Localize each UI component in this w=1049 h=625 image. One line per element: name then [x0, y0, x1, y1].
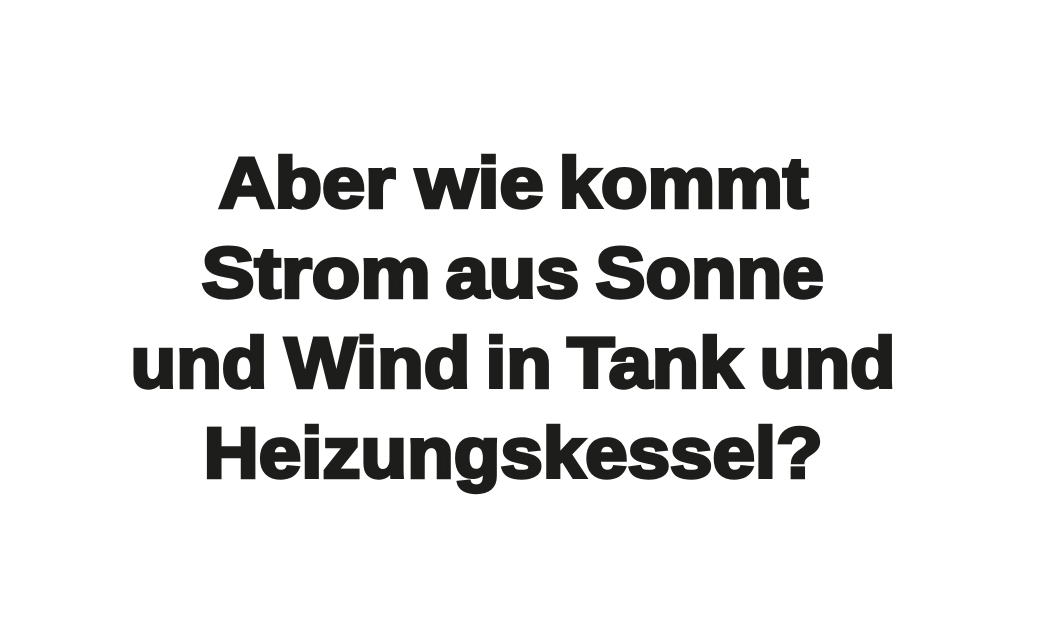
- title line 1: kommt: [559, 144, 808, 224]
- title line 3: und: [131, 324, 267, 404]
- title line 2: aus: [446, 234, 579, 314]
- title line 2: Strom: [202, 234, 431, 314]
- title line 1: wie: [415, 144, 544, 224]
- title line 3: Wind: [285, 324, 470, 404]
- title line 2: [202, 234, 824, 314]
- title line 2: Sonne: [596, 234, 824, 314]
- title line 1: Aber: [219, 144, 395, 224]
- title line 3: in: [486, 324, 552, 404]
- title line 3: Tank: [567, 324, 743, 404]
- title line 3: und: [760, 324, 895, 404]
- title line 1: [219, 144, 808, 224]
- title line 3: [131, 324, 895, 404]
- title line 4: Heizungskessel?: [204, 414, 823, 494]
